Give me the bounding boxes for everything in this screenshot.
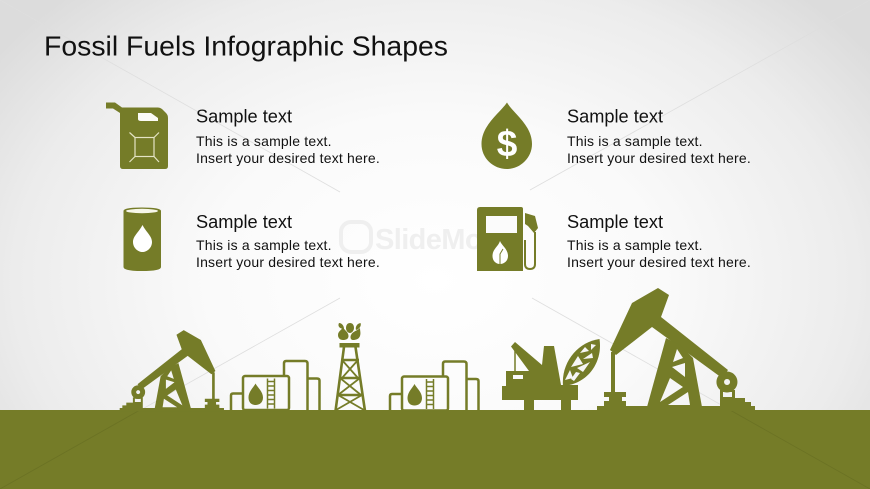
icon: oil derrick (336, 323, 365, 411)
item: jerry can (106, 102, 380, 169)
icon: small pumpjack (120, 330, 224, 411)
icon: oil barrel (124, 208, 161, 271)
watermark: SlideModel (375, 224, 522, 256)
item: fuel pump (477, 207, 751, 271)
item: dollar drop (482, 102, 751, 169)
icon: large pumpjack (597, 288, 755, 411)
icon: storage tanks left (231, 361, 320, 410)
icon: fuel pump (477, 207, 538, 271)
item: oil barrel (124, 208, 380, 271)
body text: Insert your desired text here. (196, 254, 380, 270)
icon: offshore platform (502, 339, 600, 411)
body text: Insert your desired text here. (567, 150, 751, 166)
icon: jerry can (106, 102, 168, 169)
icon: dollar drop (482, 102, 532, 169)
body text: This is a sample text. (567, 133, 703, 149)
icon: dollar drop: $ (497, 123, 518, 164)
body text: This is a sample text. (196, 237, 332, 253)
body text: Insert your desired text here. (196, 150, 380, 166)
body text: Insert your desired text here. (567, 254, 751, 270)
heading: Sample text (567, 212, 663, 232)
icon: storage tanks right (390, 362, 478, 411)
ground (0, 410, 870, 489)
body text: This is a sample text. (196, 133, 332, 149)
heading: Sample text (567, 106, 663, 126)
title: Fossil Fuels Infographic Shapes (44, 30, 448, 62)
heading: Sample text (196, 106, 292, 126)
heading: Sample text (196, 212, 292, 232)
body text: This is a sample text. (567, 237, 703, 253)
